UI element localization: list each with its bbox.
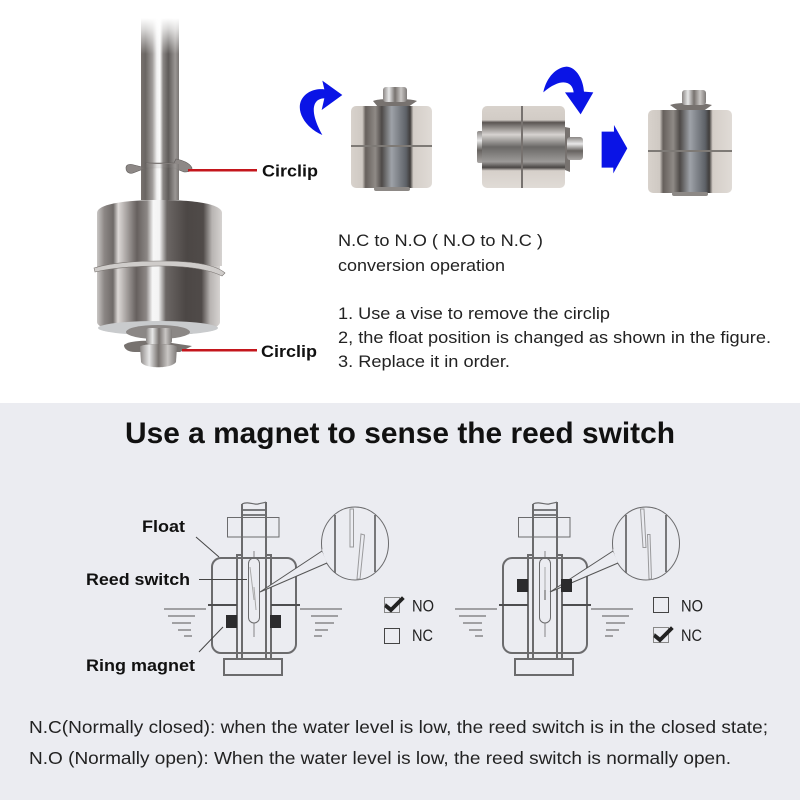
callout: lower circlip: [182, 342, 317, 361]
legend: left NO checked, NC unchecked: NC: [412, 626, 433, 645]
text: conversion title: N.C to N.O ( N.O to N.C ): [338, 231, 543, 250]
text: conversion title: [338, 231, 543, 275]
callout: upper circlip: [188, 162, 318, 180]
legend: right NO unchecked, NC checked: NC: [681, 626, 702, 645]
icon: blue curved arrow left: [300, 81, 342, 135]
text: conversion title: conversion operation: [338, 256, 505, 275]
photo: float step two: [477, 106, 583, 188]
photo: float step three: [648, 90, 732, 196]
text: conversion steps: 3. Replace it in order.: [338, 352, 510, 371]
label: Reed switch: Reed switch: [86, 570, 190, 589]
panel: product photos: [0, 0, 800, 403]
icon: blue curved arrow right: [543, 67, 593, 114]
text: conversion steps: [338, 304, 771, 371]
label: Ring magnet: [86, 627, 223, 675]
label: Float: [142, 517, 219, 557]
text: definitions: N.C(Normally closed): when the water level is low, the reed switch is in the closed state;: [29, 717, 768, 737]
icon: blue block arrow: [602, 125, 627, 173]
text: definitions: N.O (Normally open): When the water level is low, the reed switch is normally open.: [29, 748, 731, 768]
legend: right NO unchecked, NC checked: NO: [681, 596, 703, 616]
callout: lower circlip: Circlip: [261, 342, 317, 361]
text: conversion steps: 1. Use a vise to remove the circlip: [338, 304, 610, 323]
text: conversion steps: 2, the float position is changed as shown in the figure.: [338, 328, 771, 347]
callout: upper circlip: Circlip: [262, 162, 318, 180]
heading: Use a magnet to sense the reed switch: [125, 417, 675, 450]
diagram: float low, normally open: [164, 502, 388, 675]
photo: main float switch: [94, 18, 225, 367]
diagram: float high, normally closed: [455, 502, 680, 675]
legend: left NO checked, NC unchecked: NO: [412, 596, 434, 616]
photo: float step one: [351, 87, 432, 191]
legend: left NO checked, NC unchecked: [384, 596, 434, 645]
label: Float: Float: [142, 517, 185, 536]
label: Ring magnet: Ring magnet: [86, 656, 195, 675]
text: definitions: [29, 717, 768, 768]
legend: right NO unchecked, NC checked: [654, 596, 703, 645]
panel: reed switch explanation: [0, 403, 800, 800]
